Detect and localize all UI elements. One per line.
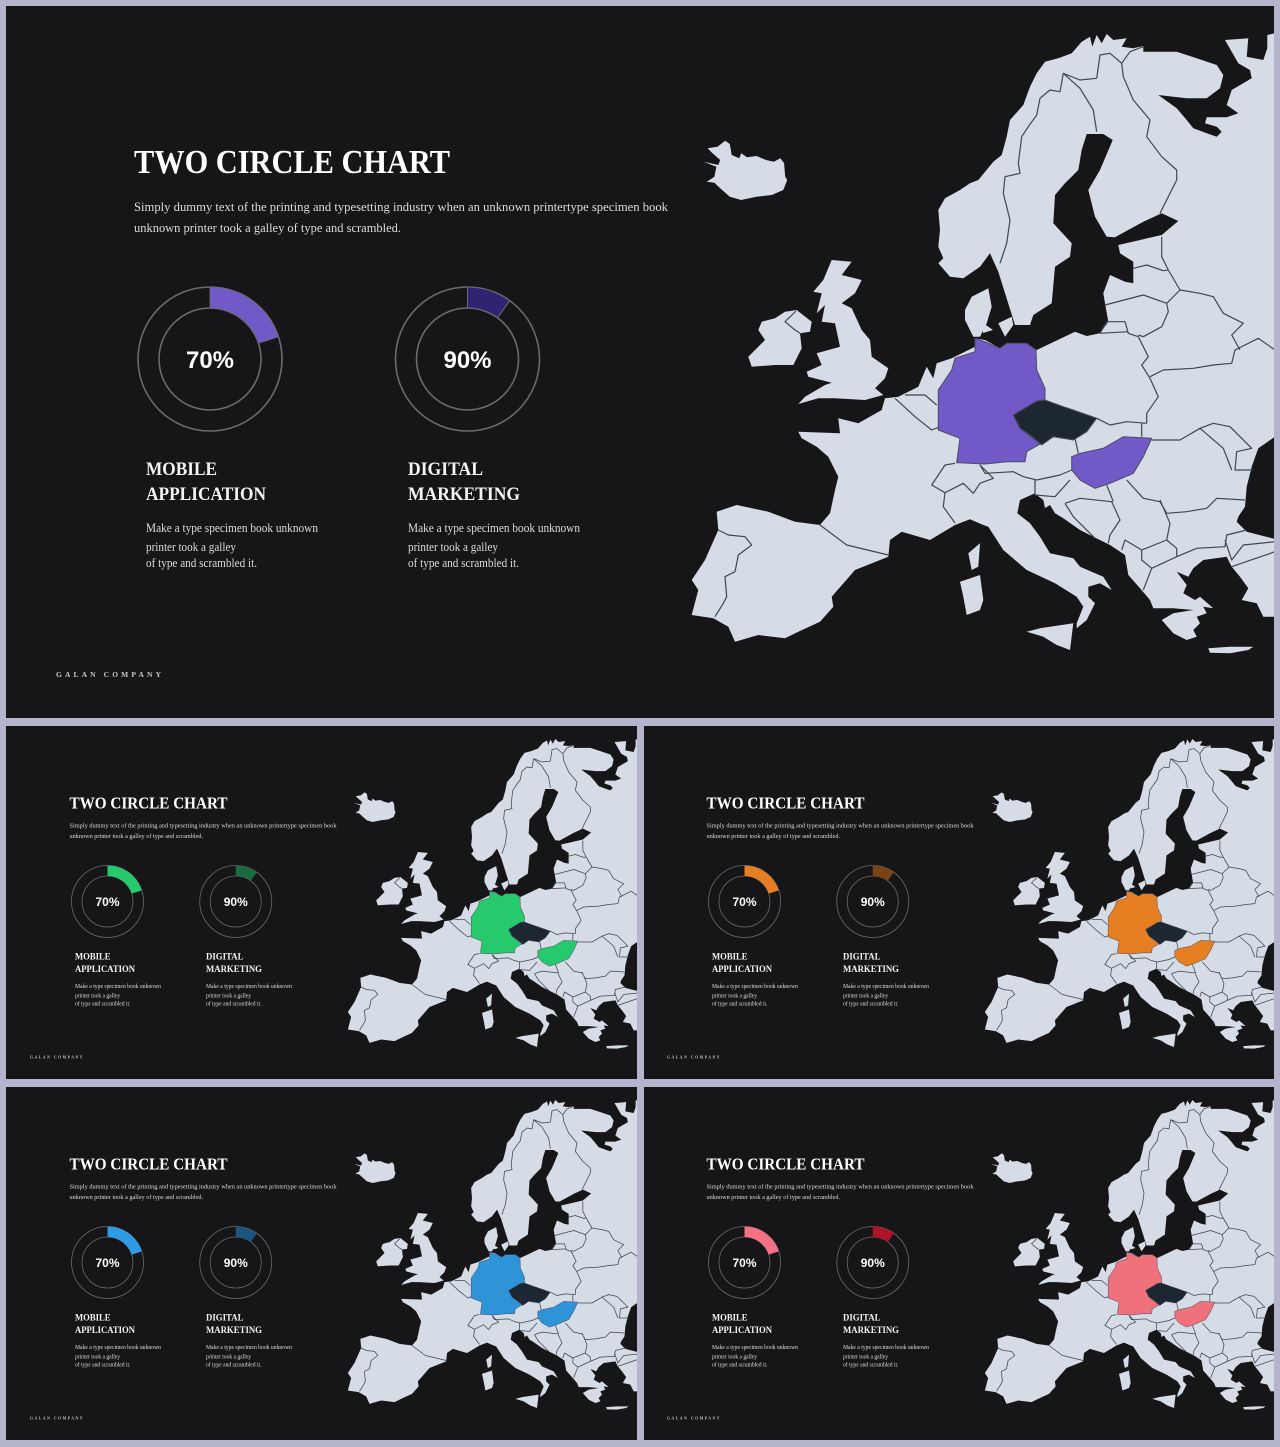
heading: mobile application: MOBILE — [75, 1314, 110, 1324]
donut chart: 90% — [837, 1226, 909, 1298]
text: digital marketing: Make a type specimen book unknown — [408, 520, 580, 535]
heading: mobile application: APPLICATION — [75, 965, 135, 975]
text: mobile application: Make a type specimen book unknown — [712, 1344, 799, 1351]
panel: orange slide — [644, 726, 1276, 1079]
donut chart: 90% — [396, 287, 540, 431]
footer: GALAN COMPANY — [667, 1416, 720, 1420]
donut chart: 90% — [200, 866, 272, 938]
donut chart: 70%: 70% — [186, 347, 234, 374]
heading: mobile application: APPLICATION — [712, 1326, 772, 1336]
description: Simply dummy text of the printing and typesetting industry when an unknown printertype specimen book — [706, 822, 974, 830]
description: Simply dummy text of the printing and typesetting industry when an unknown printertype specimen book — [134, 199, 668, 214]
description: Simply dummy text of the printing and typesetting industry when an unknown printertype specimen book — [70, 1184, 337, 1190]
title: TWO CIRCLE CHART — [706, 794, 865, 812]
text: digital marketing: printer took a galley — [843, 1354, 889, 1360]
donut chart: 70% — [708, 1226, 780, 1298]
text: mobile application: of type and scrambled it. — [712, 1000, 768, 1008]
heading: mobile application: MOBILE — [75, 952, 110, 962]
text: mobile application: printer took a galley — [75, 992, 121, 1000]
heading: digital marketing — [206, 1314, 263, 1336]
heading: digital marketing: MARKETING — [206, 965, 263, 975]
map of Europe, orange — [985, 739, 1276, 1049]
donut chart: 90%: 90% — [443, 347, 492, 374]
heading: digital marketing: MARKETING — [408, 484, 520, 505]
heading: digital marketing: DIGITAL — [206, 952, 244, 962]
text: digital marketing: of type and scrambled it. — [408, 555, 519, 570]
panel: red slide — [644, 1087, 1276, 1440]
donut chart: 70%: 70% — [732, 895, 757, 909]
description: unknown printer took a galley of type and scrambled. — [70, 1194, 203, 1201]
map of Europe, red — [985, 1100, 1276, 1410]
footer: GALAN COMPANY — [30, 1056, 83, 1060]
panel: blue slide — [6, 1087, 640, 1440]
donut chart: 90% — [837, 866, 909, 938]
heading: mobile application — [75, 1314, 135, 1333]
donut chart: 90%: 90% — [224, 1256, 248, 1270]
text: mobile application: printer took a galley — [146, 539, 236, 554]
text: mobile application: printer took a galley — [75, 1354, 121, 1360]
text: mobile application: Make a type specimen book unknown — [75, 983, 162, 990]
description — [70, 1184, 337, 1201]
heading: mobile application: APPLICATION — [75, 1326, 135, 1336]
text: digital marketing: Make a type specimen book unknown — [206, 1344, 293, 1351]
heading: mobile application: MOBILE — [712, 1314, 748, 1324]
text: mobile application — [712, 983, 799, 1008]
text: mobile application: of type and scrambled it. — [712, 1362, 768, 1368]
donut chart: 90%: 90% — [861, 895, 885, 909]
footer: GALAN COMPANY — [667, 1056, 720, 1060]
donut chart: 70% — [708, 866, 780, 938]
heading: mobile application: APPLICATION — [712, 965, 772, 975]
text: mobile application: of type and scrambled it. — [146, 555, 257, 570]
heading: digital marketing: MARKETING — [843, 965, 900, 975]
description — [70, 822, 337, 840]
text: digital marketing: of type and scrambled it. — [206, 1000, 262, 1008]
footer: GALAN COMPANY — [30, 1416, 83, 1420]
heading: digital marketing: DIGITAL — [206, 1314, 244, 1324]
text: digital marketing: of type and scrambled it. — [206, 1362, 262, 1368]
donut chart: 70%: 70% — [95, 895, 120, 909]
donut chart: 70%: 70% — [732, 1256, 757, 1270]
text: digital marketing: of type and scrambled it. — [843, 1000, 899, 1008]
text: mobile application: printer took a galley — [712, 1354, 758, 1360]
donut chart: 70%: 70% — [95, 1256, 120, 1270]
panel: green slide — [6, 726, 640, 1079]
text: mobile application: of type and scrambled it. — [75, 1000, 131, 1008]
text: mobile application — [75, 1344, 162, 1368]
heading: mobile application: MOBILE — [712, 952, 748, 962]
heading: mobile application — [712, 1314, 772, 1336]
text: digital marketing — [843, 983, 930, 1008]
text: digital marketing: printer took a galley — [843, 992, 889, 1000]
text: digital marketing — [843, 1344, 930, 1368]
heading: mobile application — [146, 462, 266, 500]
donut chart: 90%: 90% — [224, 895, 248, 909]
text: digital marketing: printer took a galley — [408, 539, 498, 554]
description: Simply dummy text of the printing and typesetting industry when an unknown printertype specimen book — [70, 822, 337, 830]
heading: digital marketing — [408, 462, 520, 500]
text: mobile application: Make a type specimen book unknown — [712, 983, 799, 990]
description: unknown printer took a galley of type and scrambled. — [70, 833, 203, 840]
title: TWO CIRCLE CHART — [706, 1154, 865, 1174]
text: digital marketing: Make a type specimen book unknown — [206, 983, 293, 990]
title: TWO CIRCLE CHART — [70, 1154, 228, 1174]
text: mobile application — [75, 983, 162, 1008]
heading: mobile application: MOBILE — [146, 459, 217, 480]
text: digital marketing — [206, 983, 293, 1008]
heading: digital marketing — [843, 953, 899, 972]
heading: digital marketing: DIGITAL — [843, 1314, 880, 1324]
description: unknown printer took a galley of type and scrambled. — [706, 833, 840, 840]
donut chart: 90% — [200, 1226, 272, 1298]
text: digital marketing: Make a type specimen book unknown — [843, 1344, 930, 1351]
text: digital marketing: printer took a galley — [206, 1354, 252, 1360]
description — [706, 822, 974, 840]
heading: mobile application: APPLICATION — [146, 484, 266, 505]
heading: digital marketing — [843, 1314, 900, 1336]
description — [134, 199, 668, 235]
heading: digital marketing: MARKETING — [206, 1326, 263, 1336]
text: digital marketing: of type and scrambled it. — [843, 1362, 899, 1368]
text: mobile application — [146, 520, 318, 570]
text: mobile application — [712, 1344, 799, 1368]
heading: mobile application — [712, 953, 772, 972]
heading: digital marketing: DIGITAL — [408, 459, 483, 480]
donut chart: 70% — [72, 1226, 144, 1298]
text: digital marketing: Make a type specimen book unknown — [843, 983, 930, 990]
description — [706, 1184, 974, 1201]
description: unknown printer took a galley of type and scrambled. — [134, 220, 401, 235]
map of Europe, green — [348, 739, 640, 1049]
donut chart: 70% — [72, 866, 144, 938]
footer: GALAN COMPANY — [56, 670, 162, 679]
donut chart: 90%: 90% — [861, 1256, 885, 1270]
map of Europe with Germany and Hungary highlighted — [692, 33, 1275, 653]
heading: digital marketing: DIGITAL — [843, 952, 880, 962]
text: digital marketing — [206, 1344, 293, 1368]
text: mobile application: of type and scrambled it. — [75, 1362, 131, 1368]
donut chart: 70% — [138, 287, 282, 431]
description: unknown printer took a galley of type and scrambled. — [706, 1194, 840, 1201]
text: digital marketing — [408, 520, 580, 570]
text: digital marketing: printer took a galley — [206, 992, 252, 1000]
description: Simply dummy text of the printing and typesetting industry when an unknown printertype specimen book — [706, 1184, 974, 1190]
heading: mobile application — [75, 953, 135, 972]
heading: digital marketing — [206, 953, 262, 972]
title: TWO CIRCLE CHART — [70, 794, 228, 812]
map of Europe, blue — [348, 1100, 640, 1410]
heading: digital marketing: MARKETING — [843, 1326, 900, 1336]
title: TWO CIRCLE CHART — [134, 144, 450, 181]
text: mobile application: printer took a galley — [712, 992, 758, 1000]
text: mobile application: Make a type specimen book unknown — [75, 1344, 162, 1351]
text: mobile application: Make a type specimen book unknown — [146, 520, 318, 535]
panel: purple main slide — [6, 6, 1275, 718]
